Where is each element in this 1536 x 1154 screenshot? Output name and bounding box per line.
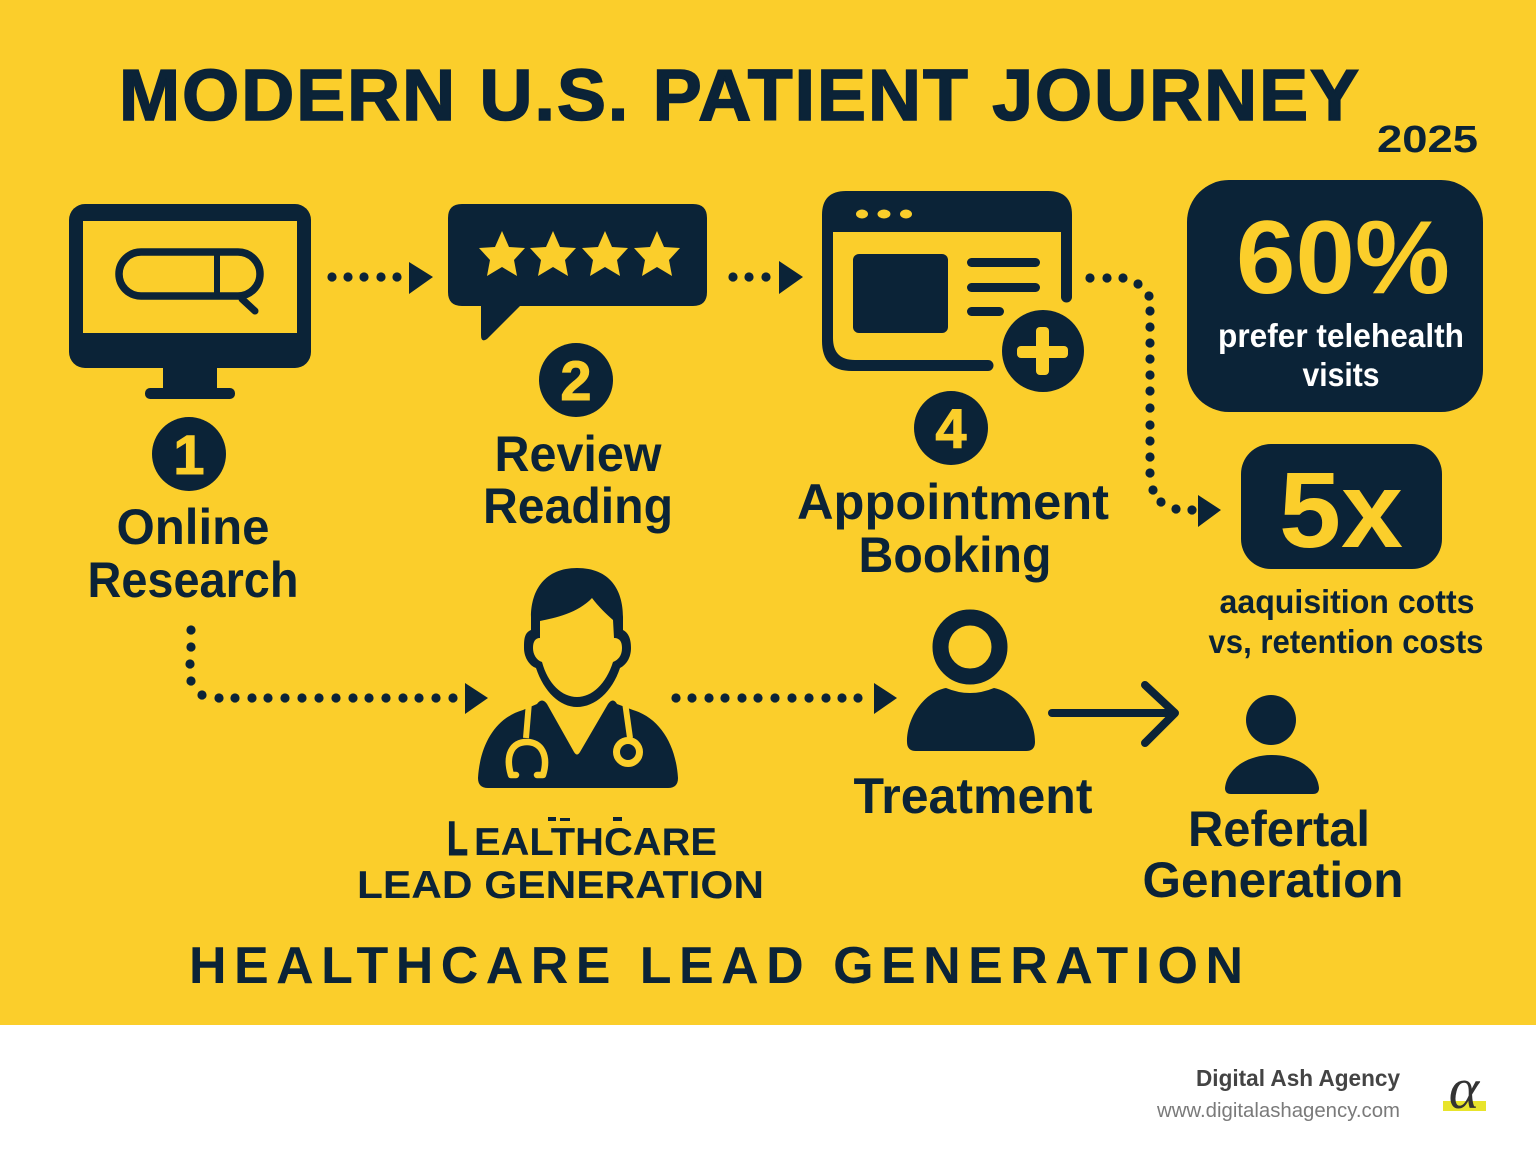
agency url: www.digitalashagency.com [1156,1100,1400,1122]
arrow: step 4 to 5x callout [1085,273,1221,527]
referral label [1142,801,1404,908]
step 4 badge: 4 [935,397,967,460]
icon: doctor with stethoscope [478,568,678,788]
arrow: step 2 to step 4 [728,261,803,294]
step 4 badge [914,391,988,465]
icon: review speech bubble with stars [448,204,707,340]
step 2 label: Review [494,426,662,482]
step 2 badge [539,343,613,417]
callout: 5x badge [1241,444,1442,570]
doctor label: EALTHCARE [474,821,717,864]
callout: 60% telehealth stat [1187,180,1483,412]
step 1 label: Research [88,552,298,608]
treatment label: Treatment [854,768,1093,824]
callout: 60% telehealth stat: prefer telehealth [1218,317,1464,354]
title: MODERN U.S. PATIENT JOURNEY [119,56,1361,136]
callout: 60% telehealth stat: visits [1302,356,1380,393]
step 4 label [797,474,1109,583]
icon: referral person [1225,695,1319,794]
step 4 label: Booking [858,527,1052,583]
year label: 2025 [1377,119,1478,161]
referral label: Refertal [1188,801,1370,857]
arrow: step 1 to step 2 [327,262,433,294]
step 1 label [88,499,298,608]
doctor label [357,813,764,907]
arrow: research down to doctor [185,625,488,714]
5x caption: aaquisition cotts [1220,583,1474,620]
callout: 5x badge: 5x [1279,449,1403,570]
footer heading: healthcare lead generation: HEALTHCARE LEAD GENERATION [189,937,1243,995]
icon: monitor with search bar [69,204,311,399]
agency logo: α [1449,1056,1481,1121]
step 1 label: Online [116,499,270,555]
step 1 badge: 1 [173,423,205,486]
referral label: Generation [1142,852,1404,908]
step 2 label [483,426,673,534]
arrow: treatment to referral [1052,685,1175,743]
step 2 badge: 2 [560,349,592,412]
doctor label: L [447,813,468,866]
arrow: doctor to treatment [671,683,897,714]
step 4 label: Appointment [797,474,1109,530]
icon: browser booking window with plus [822,191,1084,392]
callout: 60% telehealth stat: 60% [1236,200,1450,316]
step 1 badge [152,417,226,491]
agency name: Digital Ash Agency [1196,1065,1400,1091]
step 2 label: Reading [483,478,673,534]
5x caption [1208,583,1484,660]
5x caption: vs, retention costs [1208,623,1484,660]
doctor label: LEAD GENERATION [357,864,764,907]
icon: treatment person [907,618,1035,751]
